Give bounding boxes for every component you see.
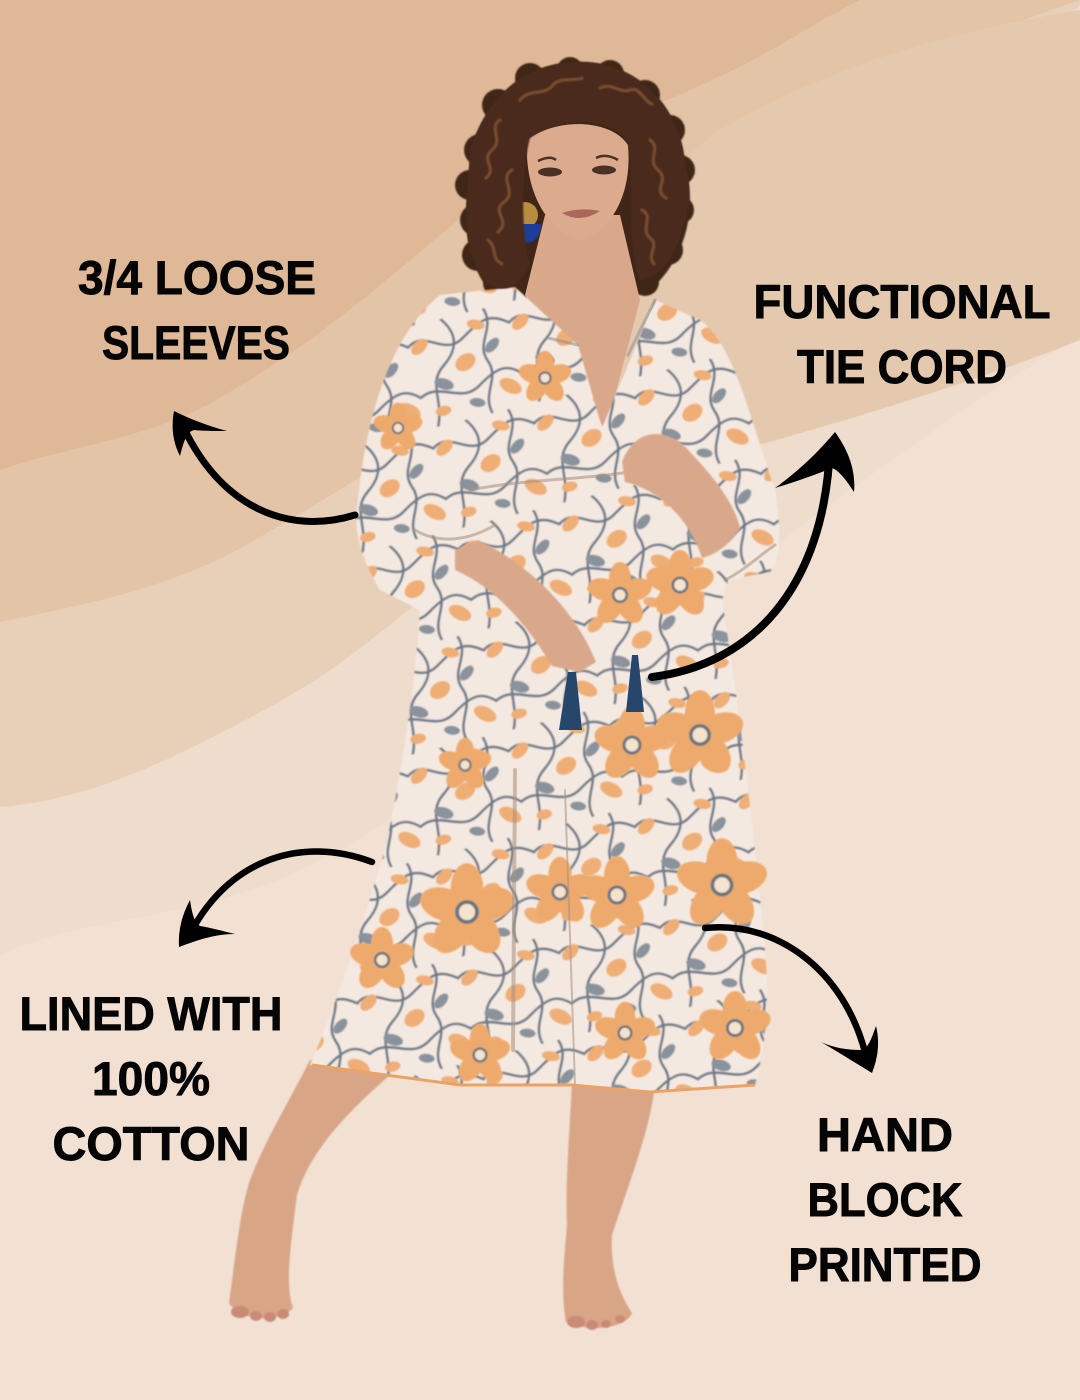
callout: 3/4 loose sleeves [78,251,316,369]
hair back [455,57,695,303]
right hand and forearm [622,434,740,558]
arrow: to tie cord [652,432,854,677]
callout: hand block printed: PRINTED [788,1238,982,1291]
callout: 3/4 loose sleeves: 3/4 LOOSE [78,251,316,304]
callout: hand block printed [788,1108,982,1291]
face [527,124,629,240]
callout: hand block printed: HAND [817,1108,953,1161]
arrow: to hem lining [179,852,372,947]
callout: lined with 100% cotton: 100% [92,1052,210,1105]
large printed flowers [347,351,774,1086]
legs and feet [229,1060,655,1330]
callout: lined with 100% cotton [20,987,282,1170]
callout: hand block printed: BLOCK [808,1173,963,1226]
callout: functional tie cord [754,275,1050,393]
dress [310,287,779,1092]
callout: functional tie cord: FUNCTIONAL [754,275,1050,328]
arrow: to block print [705,927,878,1073]
callout: lined with 100% cotton: COTTON [52,1117,250,1170]
callout: lined with 100% cotton: LINED WITH [20,987,282,1040]
left hand and forearm [455,540,596,672]
callout: functional tie cord: TIE CORD [797,340,1007,393]
callout: 3/4 loose sleeves: SLEEVES [102,316,290,369]
facial features [538,156,618,218]
earring [512,202,541,243]
tassels [559,655,644,730]
hem trim [312,1065,755,1092]
neck and chest [525,215,640,430]
dress folds and seams [415,300,775,1085]
arrow: to sleeves [173,411,355,521]
hair front curls [466,62,689,289]
model figure [229,57,779,1330]
